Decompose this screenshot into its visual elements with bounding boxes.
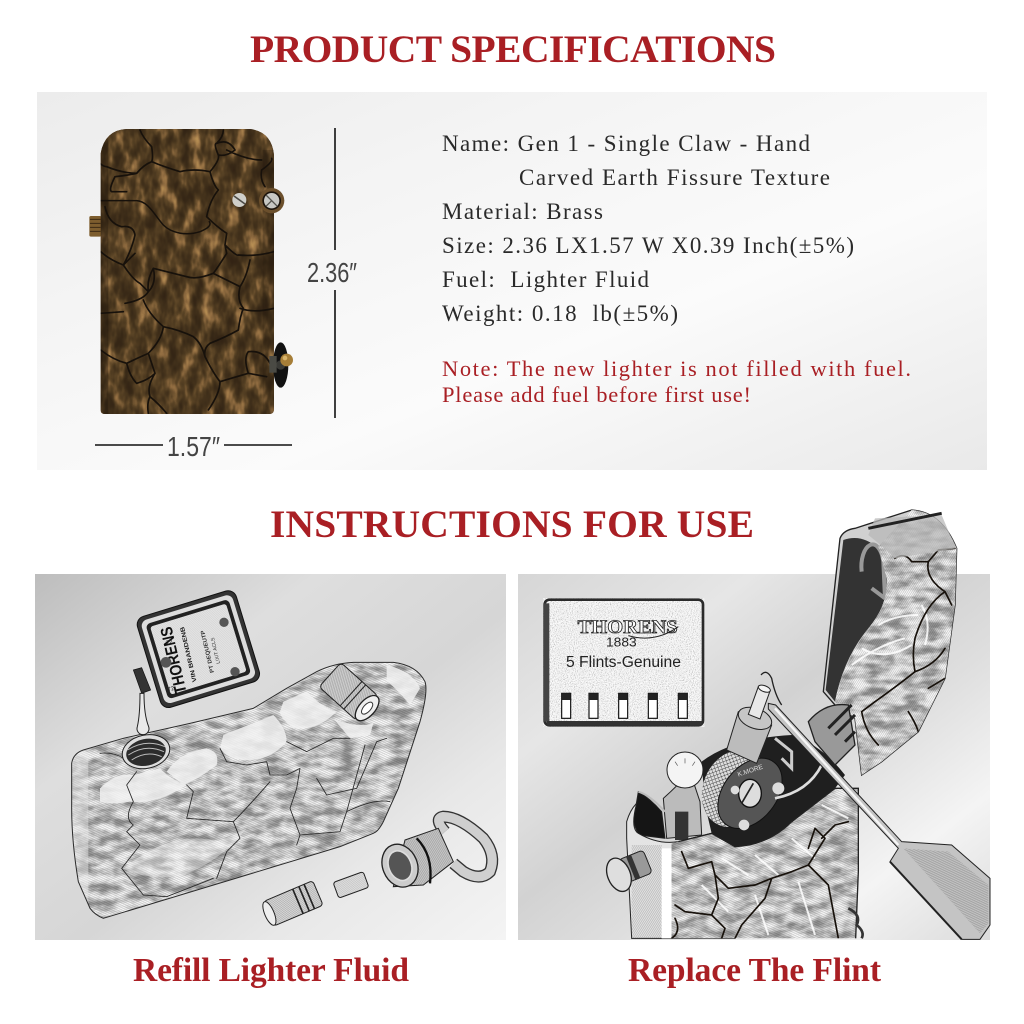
spec list: Name: Gen 1 - Single Claw - Hand [442,131,810,156]
caption: replace the flint: Replace The Flint [628,952,882,989]
side latch knob [269,342,293,388]
flint spring screw [260,881,323,928]
flint package card [543,598,704,727]
caption: refill lighter fluid: Refill Lighter Fluid [133,952,409,989]
side thumb screw [602,847,655,895]
fuel tin: LIXIT ACLS [210,636,222,664]
left flint wheel [89,216,101,237]
dimension: width 1.57 in: 1.57″ [167,431,220,462]
note: Please add fuel before first use! [442,382,751,407]
panel: replace the flint [518,508,990,940]
dimension: height 2.36 in: 2.36″ [307,257,357,288]
flint package card: 1883 [606,636,637,650]
flint package card: THORENS [578,617,678,638]
note: Note: The new lighter is not filled with fuel. [442,356,911,381]
fuel tin: 72 [167,686,176,694]
panel: product specifications [37,92,987,470]
title: product specifications: PRODUCT SPECIFICATIONS [250,27,776,71]
fuel tin: PT DEQUEUTP [200,629,216,673]
spec list: Fuel: Lighter Fluid [442,267,650,292]
spec list: Carved Earth Fissure Texture [519,165,830,190]
spec list: Weight: 0.18 lb(±5%) [442,301,678,326]
flint tool [768,703,990,939]
fuel tin: 72 [165,639,174,647]
flint tube [727,672,782,763]
screw cap with ring [376,817,492,893]
lighter body [98,127,277,417]
spec list [442,131,854,326]
illustration: lighter body [70,660,430,920]
hinge screw [259,188,284,213]
flint pellet [333,872,369,898]
open lid [823,508,962,778]
flint package card: 5 Flints-Genuine [566,654,681,671]
photo: brass lighter with earth fissure texture [89,127,293,417]
spec list: Material: Brass [442,199,603,224]
fuel tin [135,589,262,710]
fuel tin: VIN BRANDENB [180,625,199,683]
wick inserted pin with ball [633,752,703,840]
lighter interior mechanism [689,705,855,847]
fuel tin: THORENS [157,625,191,696]
hinge cylinder [319,663,384,726]
spec list: Size: 2.36 LX1.57 W X0.39 Inch(±5%) [442,233,854,258]
title: instructions for use: INSTRUCTIONS FOR USE [270,502,754,546]
spout and fluid drip [133,668,151,735]
small silver screw [232,193,246,207]
panel: refill lighter fluid [35,574,506,940]
lighter case body [627,787,863,940]
note [442,356,911,407]
lighter interior mechanism: K.MORE [737,764,764,779]
filler hole [119,730,173,773]
